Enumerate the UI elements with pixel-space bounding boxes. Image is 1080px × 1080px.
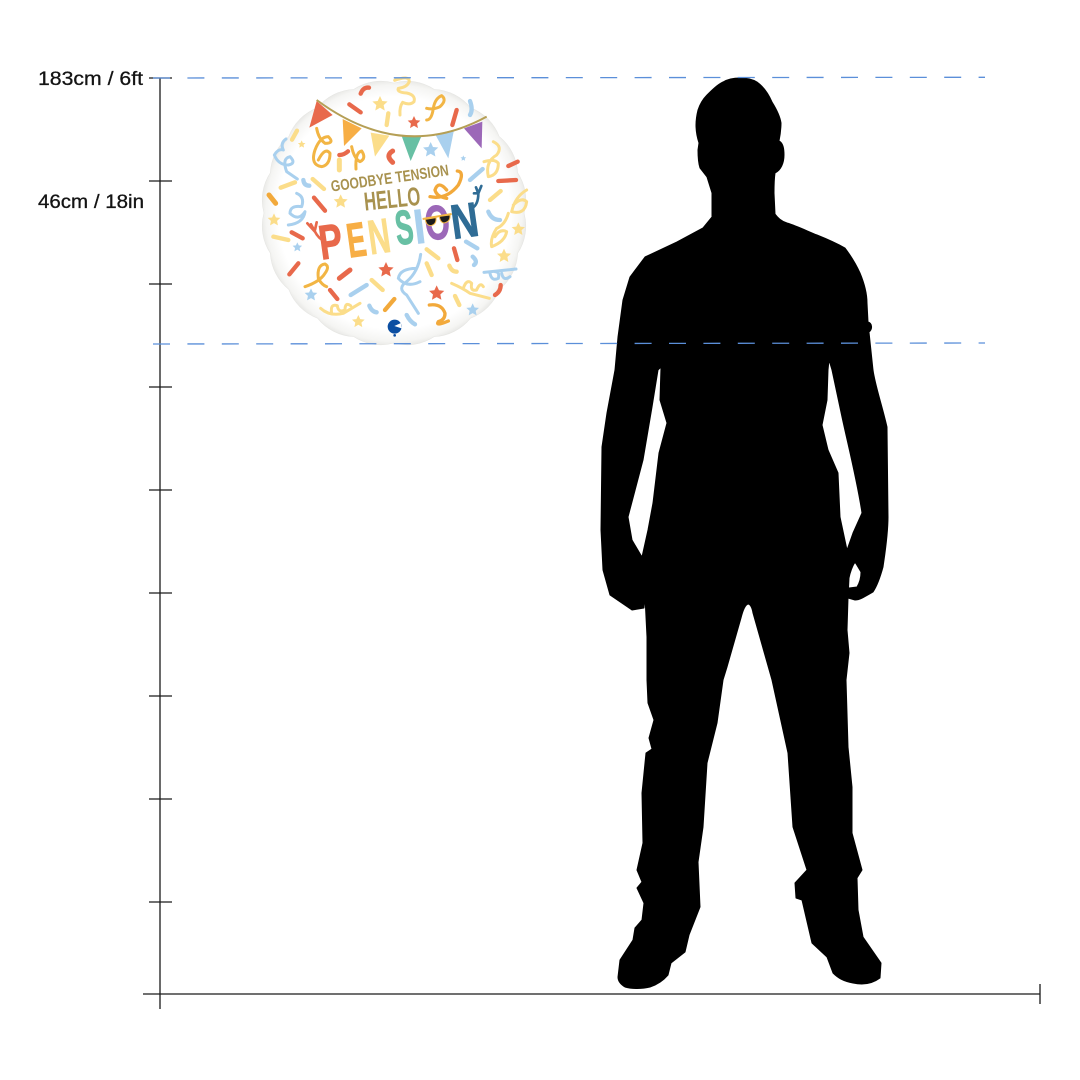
dashed guide: balloon height	[153, 343, 985, 344]
swirl above pension	[430, 171, 461, 198]
balloon text: pension: P	[315, 213, 346, 270]
balloon body	[262, 81, 526, 345]
brand logo	[388, 320, 402, 337]
baseline axis	[143, 984, 1040, 1004]
balloon text: pension: I	[411, 200, 428, 255]
balloon	[262, 78, 527, 345]
confetti stars	[268, 96, 525, 327]
y axis with ticks	[149, 78, 172, 1009]
balloon text: goodbye tension: GOODBYE TENSION	[330, 161, 450, 195]
balloon text: pension: N	[365, 208, 394, 265]
label: balloon height: 46cm / 18in	[38, 192, 144, 213]
label: person height: 183cm / 6ft	[38, 69, 144, 90]
balloon text: pension	[315, 193, 482, 270]
balloon text: hello: HELLO	[362, 181, 422, 216]
left arm of letter p	[307, 222, 325, 242]
balloon text: pension: N	[447, 193, 482, 250]
balloon text: pension: E	[343, 213, 369, 269]
bunting flags	[309, 100, 487, 161]
balloon text: pension: O	[422, 194, 452, 251]
sunglasses	[423, 214, 452, 226]
right arm of letter n	[472, 186, 481, 208]
balloon text: pension: S	[392, 201, 416, 256]
dashed guide: person height	[153, 76, 985, 79]
confetti swirls	[274, 78, 527, 324]
person silhouette	[601, 78, 888, 988]
confetti capsules	[269, 88, 518, 324]
